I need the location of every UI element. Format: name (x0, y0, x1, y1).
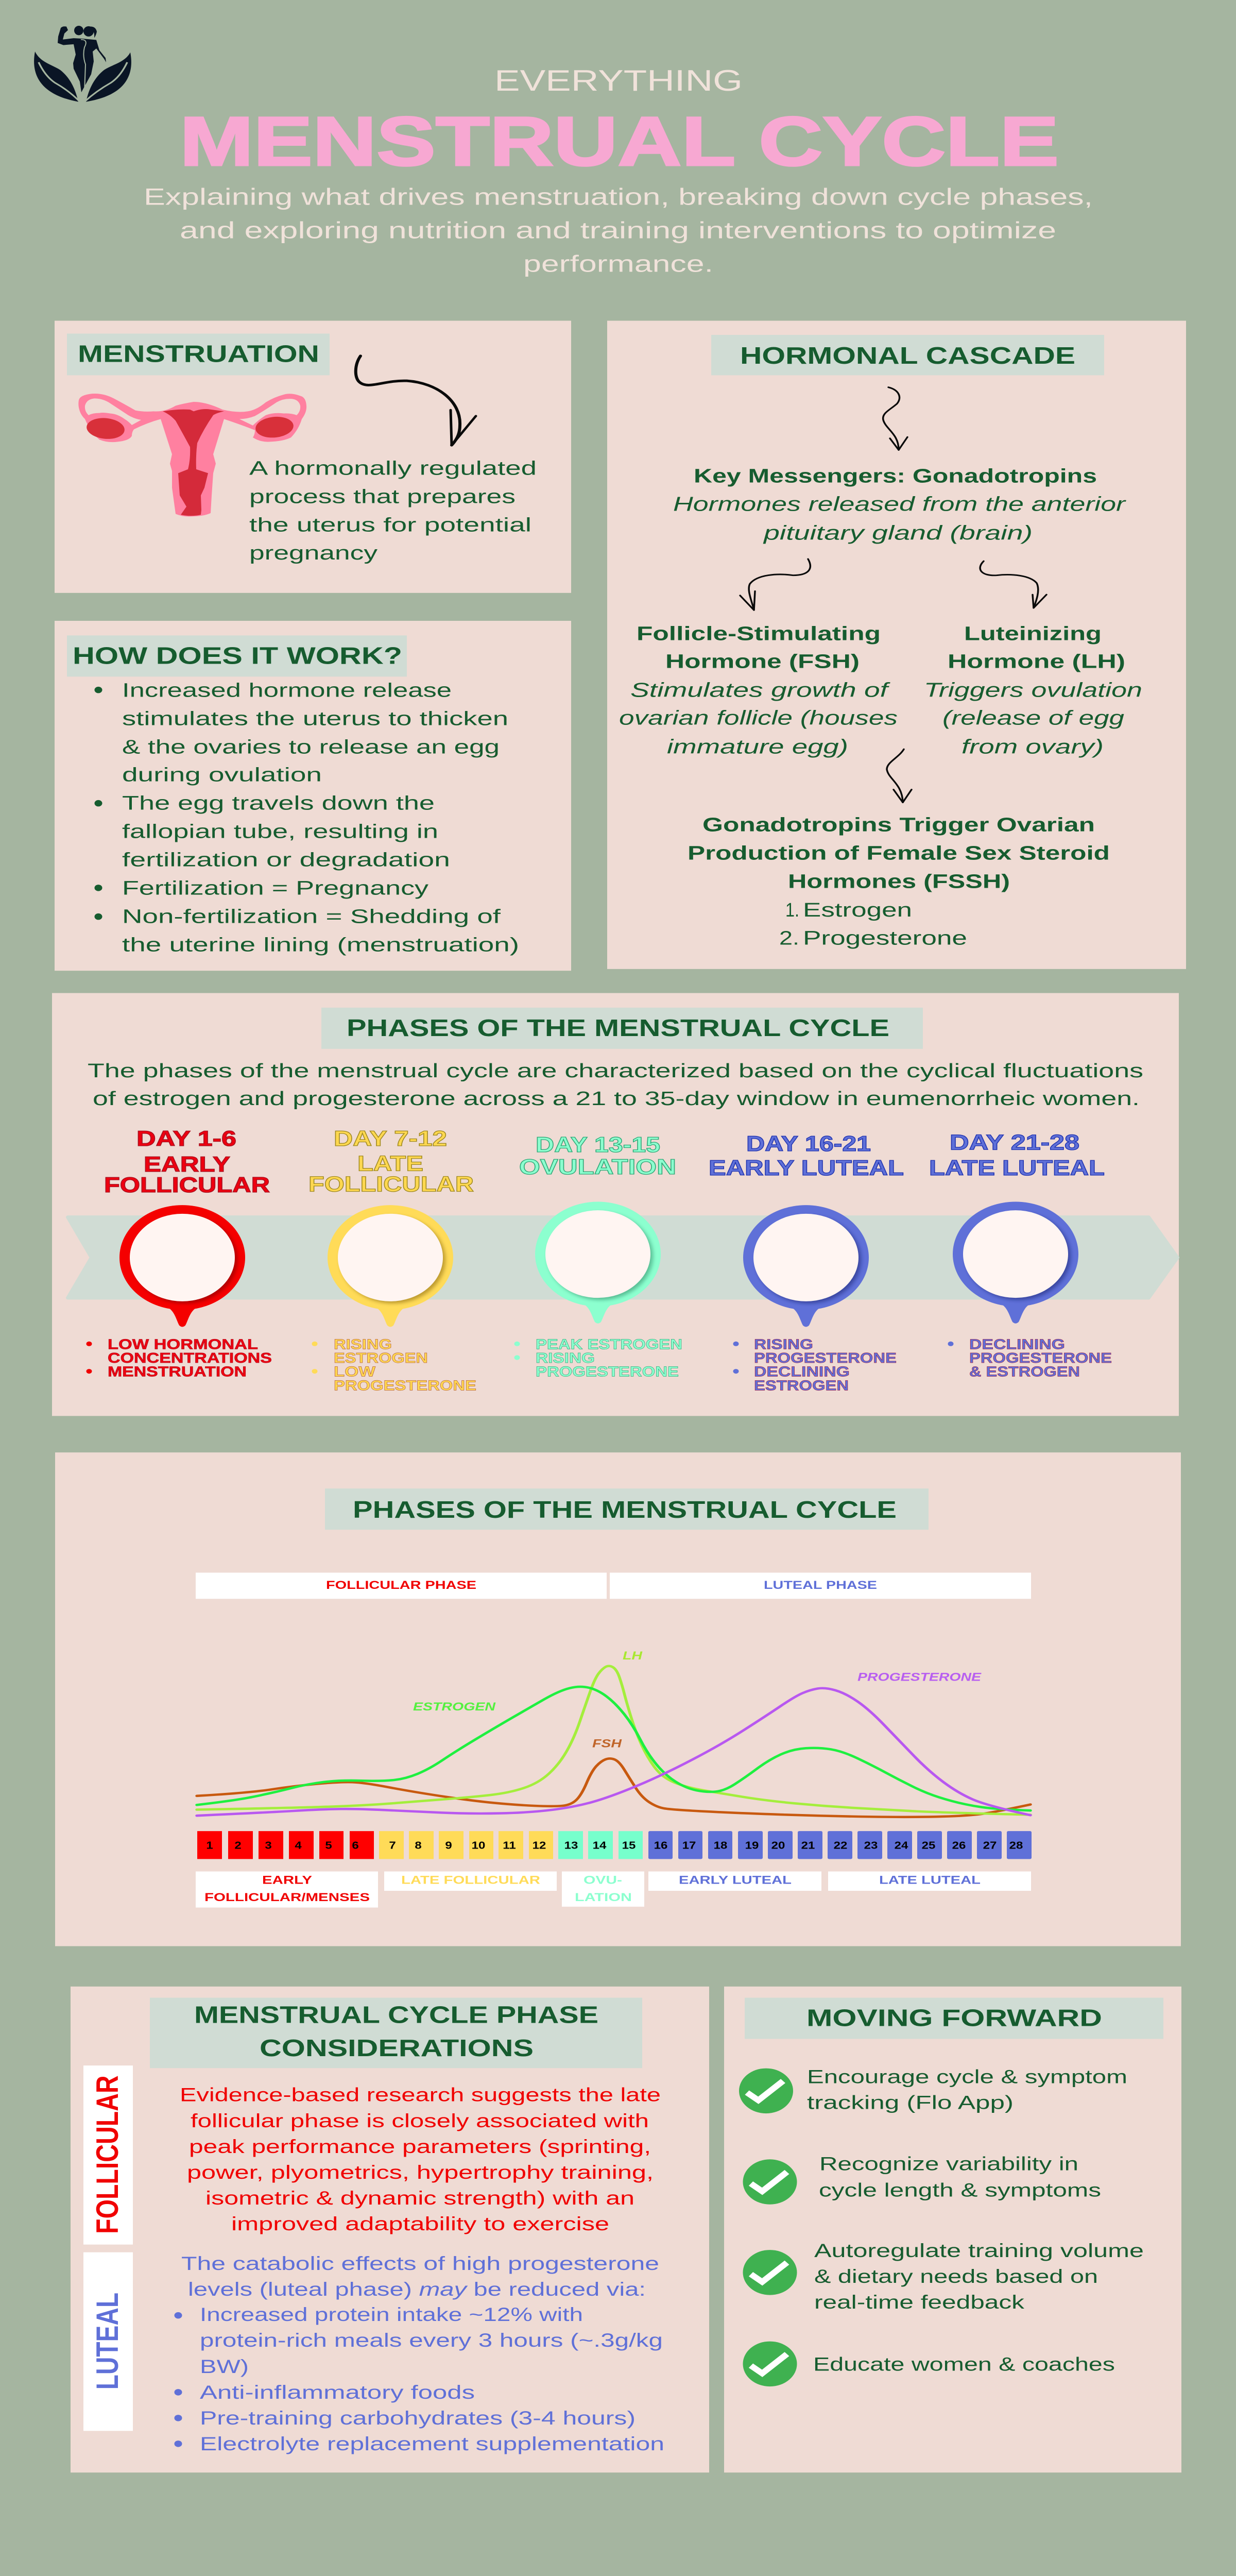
text: ovarian production: Gonadotropins Trigger Ovarian (702, 814, 1095, 835)
notes: late luteal: PROGESTERONE (969, 1350, 1112, 1366)
text: ovarian production: 1. (785, 899, 799, 921)
phase heading: early follicular: EARLY (144, 1152, 230, 1176)
main title: MENSTRUAL CYCLE (180, 103, 1059, 180)
panel: hormonal cascade (607, 320, 1186, 969)
text: intro: of estrogen and progesterone across a 21 to 35-day window in eumenorrheic women. (93, 1088, 1140, 1109)
text: definition: process that prepares (249, 485, 516, 507)
day strip: days 1 to 28: 9 (445, 1839, 452, 1851)
notes: early luteal: RISING (754, 1337, 813, 1352)
notes: early follicular: LOW HORMONAL (108, 1337, 258, 1352)
side label: follicular: FOLLICULAR (90, 2075, 125, 2234)
icon: logo, flexing woman with leaves (34, 26, 131, 102)
bullet list: stimulates the uterus to thicken (122, 707, 508, 730)
pin: early luteal (743, 1205, 869, 1327)
bullet list: fallopian tube, resulting in (122, 820, 438, 842)
text: key messengers: Hormones released from the anterior (673, 493, 1126, 516)
label: early luteal (648, 1871, 821, 1891)
curve label: LH: LH (623, 1650, 643, 1662)
text: follicular evidence: Evidence-based research suggests the late (180, 2084, 661, 2105)
item: variability: Recognize variability in (819, 2153, 1078, 2175)
icon: uterus illustration (78, 394, 306, 517)
notes: early follicular: CONCENTRATIONS (108, 1350, 272, 1366)
notes: ovulation: PEAK ESTROGEN (536, 1337, 682, 1352)
phase heading: late follicular: FOLLICULAR (308, 1172, 474, 1196)
day strip: days 1 to 28: 14 (593, 1839, 607, 1851)
phase heading: late luteal: LATE LUTEAL (929, 1156, 1105, 1180)
item: cycle tracking (739, 2066, 1127, 2113)
notes: ovulation (514, 1337, 682, 1380)
text: follicular evidence: isometric & dynamic strength) with an (205, 2188, 634, 2209)
curve: progesterone (197, 1688, 1031, 1816)
phase heading: early follicular (104, 1126, 270, 1197)
text: ovarian production: Progesterone (803, 927, 967, 948)
day strip: days 1 to 28: 26 (952, 1839, 966, 1851)
label: early follicular/menses: FOLLICULAR/MENSES (204, 1891, 370, 1904)
bullet list (95, 679, 519, 956)
bullet list: The egg travels down the (122, 792, 435, 814)
text: luteinizing hormone: Triggers ovulation (924, 679, 1142, 702)
text: definition: the uterus for potential (249, 514, 531, 536)
heading: menstruation (67, 334, 330, 375)
ribbon arrow (68, 1217, 1177, 1298)
heading: phases of the menstrual cycle (325, 1488, 929, 1530)
heading: menstrual cycle phase considerations: CONSIDERATIONS (260, 2034, 534, 2061)
pin: late luteal (953, 1201, 1078, 1324)
panel: phase considerations (71, 1987, 709, 2472)
text: follicle-stimulating hormone: Hormone (FSH) (665, 650, 860, 672)
text: luteal interventions: BW) (200, 2355, 249, 2377)
text: definition (249, 457, 537, 564)
day strip: days 1 to 28: 17 (682, 1839, 696, 1851)
panel: moving forward (724, 1987, 1181, 2472)
pin: ovulation (535, 1201, 661, 1324)
text: ovarian production (688, 814, 1110, 948)
day strip: days 1 to 28: 16 (654, 1839, 667, 1851)
day strip: days 1 to 28: 25 (922, 1839, 935, 1851)
text: luteal interventions: Electrolyte replacement supplementation (200, 2433, 664, 2454)
item: variability (743, 2153, 1101, 2205)
heading: moving forward (745, 1998, 1163, 2039)
arrow: wavy down to sex steroids (887, 749, 912, 803)
text: definition: A hormonally regulated (249, 457, 537, 479)
phase heading: early luteal (709, 1131, 904, 1180)
label: late luteal (828, 1871, 1031, 1891)
heading: how does it work (67, 635, 407, 676)
side label: luteal: LUTEAL (90, 2293, 125, 2389)
day strip: days 1 to 28: 7 (389, 1839, 396, 1851)
subtitle: and exploring nutrition and training interventions to optimize (180, 217, 1056, 243)
bullet list: Fertilization = Pregnancy (122, 877, 429, 899)
label: late follicular (384, 1871, 557, 1891)
curve: LH (197, 1666, 1031, 1815)
notes: early luteal: PROGESTERONE (754, 1350, 897, 1366)
banner: luteal phase: LUTEAL PHASE (764, 1579, 877, 1592)
phase heading: early follicular: FOLLICULAR (104, 1173, 270, 1197)
text: follicle-stimulating hormone: ovarian follicle (houses (619, 707, 898, 730)
day strip: days 1 to 28: 22 (834, 1839, 847, 1851)
bullet list: fertilization or degradation (122, 849, 450, 871)
curve: estrogen (197, 1687, 1031, 1810)
text: ovarian production: Estrogen (803, 899, 912, 921)
heading: phases of the menstrual cycle (321, 1008, 923, 1049)
day strip: days 1 to 28: 11 (503, 1839, 516, 1851)
side label: follicular (83, 2065, 133, 2245)
text: follicle-stimulating hormone: Stimulates growth of (630, 679, 890, 702)
text: follicular evidence: improved adaptability to exercise (231, 2213, 609, 2234)
text: luteinizing hormone (924, 622, 1142, 758)
text: follicle-stimulating hormone: Follicle-Stimulating (637, 622, 881, 645)
item: autoregulate (743, 2240, 1144, 2313)
subtitle (144, 184, 1093, 277)
text: luteal interventions: Pre-training carbohydrates (3-4 hours) (200, 2407, 636, 2429)
heading: hormonal cascade: HORMONAL CASCADE (740, 342, 1075, 369)
text: luteinizing hormone: (release of egg (942, 707, 1124, 730)
banner: follicular phase: FOLLICULAR PHASE (326, 1579, 476, 1592)
subtitle: performance. (523, 251, 713, 277)
side label: luteal (83, 2252, 133, 2431)
day strip: days 1 to 28: 23 (864, 1839, 878, 1851)
text: luteinizing hormone: Luteinizing (964, 622, 1102, 645)
label: early follicular/menses: EARLY (262, 1874, 313, 1887)
banner: follicular phase (196, 1572, 607, 1599)
text: definition: pregnancy (249, 541, 378, 564)
label: late luteal: LATE LUTEAL (879, 1874, 981, 1887)
day strip: days 1 to 28: 3 (265, 1839, 272, 1851)
label: early follicular/menses (196, 1871, 378, 1907)
pin: late follicular (328, 1205, 453, 1327)
heading: hormonal cascade (711, 335, 1104, 375)
phase heading: early follicular: DAY 1-6 (136, 1126, 236, 1150)
label: ovulation: LATION (575, 1891, 632, 1904)
label: ovulation: OVU- (583, 1874, 622, 1887)
phase heading: ovulation: DAY 13-15 (536, 1132, 660, 1157)
phase heading: early luteal: EARLY LUTEAL (709, 1156, 904, 1180)
notes: late follicular: LOW (334, 1364, 375, 1380)
bullet list: Increased hormone release (122, 679, 452, 701)
day strip: days 1 to 28: 2 (234, 1839, 242, 1851)
item: cycle tracking: Encourage cycle & symptom (807, 2066, 1127, 2087)
heading: menstrual cycle phase considerations (150, 1998, 642, 2068)
notes: early follicular (87, 1337, 272, 1380)
label: early luteal: EARLY LUTEAL (679, 1874, 792, 1887)
heading: phases of the menstrual cycle: PHASES OF THE MENSTRUAL CYCLE (347, 1014, 889, 1041)
bullet list: & the ovaries to release an egg (122, 736, 500, 758)
phase heading: early luteal: DAY 16-21 (746, 1131, 871, 1156)
phase heading: late luteal: DAY 21-28 (950, 1130, 1079, 1155)
day strip: days 1 to 28: 13 (564, 1839, 578, 1851)
curve label: progesterone: PROGESTERONE (857, 1671, 982, 1684)
phase heading: late follicular: LATE (357, 1151, 423, 1176)
subtitle: Explaining what drives menstruation, breaking down cycle phases, (144, 184, 1093, 210)
item: autoregulate: Autoregulate training volume (814, 2240, 1144, 2261)
text: follicular evidence: power, plyometrics, hypertrophy training, (187, 2162, 654, 2183)
label: late follicular: LATE FOLLICULAR (401, 1874, 540, 1887)
panel: hormone chart (55, 1452, 1181, 1946)
panel: menstruation (55, 320, 571, 593)
notes: late follicular: RISING (334, 1337, 392, 1352)
item: autoregulate: real-time feedback (814, 2291, 1025, 2313)
arrow: wavy down to key messengers (883, 387, 907, 450)
text: luteinizing hormone: from ovary) (962, 736, 1104, 758)
day strip: days 1 to 28: 18 (714, 1839, 727, 1851)
text: luteal interventions: levels (luteal phase) may be reduced via: (188, 2278, 646, 2300)
text: luteal interventions: protein-rich meals every 3 hours (~.3g/kg (200, 2330, 663, 2351)
text: ovarian production: 2. (779, 927, 799, 948)
text: key messengers (673, 465, 1126, 545)
text: luteal interventions: The catabolic effects of high progesterone (181, 2252, 659, 2274)
panel: how does it work (55, 621, 571, 971)
arrow: to FSH (740, 559, 810, 610)
line chart: hormone curves (197, 1650, 1031, 1817)
text: key messengers: pituitary gland (brain) (762, 522, 1033, 545)
day strip: days 1 to 28: 4 (295, 1839, 302, 1851)
text: luteal interventions: Increased protein intake ~12% with (200, 2304, 583, 2325)
day strip: days 1 to 28: 28 (1009, 1839, 1023, 1851)
day strip: days 1 to 28: 21 (801, 1839, 815, 1851)
heading: moving forward: MOVING FORWARD (806, 2004, 1102, 2031)
curve: FSH (197, 1758, 1031, 1817)
bullet list: during ovulation (122, 764, 322, 786)
phase heading: late follicular (308, 1126, 474, 1196)
curve label: estrogen: ESTROGEN (413, 1701, 496, 1713)
text: luteal interventions (174, 2252, 664, 2454)
notes: late luteal (948, 1337, 1112, 1380)
item: educate: Educate women & coaches (813, 2353, 1115, 2375)
phase heading: ovulation (519, 1132, 676, 1179)
phase heading: late follicular: DAY 7-12 (334, 1126, 447, 1150)
pin: early follicular (119, 1205, 245, 1327)
arrow: hand-drawn curve (356, 356, 476, 445)
item: autoregulate: & dietary needs based on (814, 2265, 1098, 2287)
text: follicular evidence: peak performance parameters (sprinting, (189, 2136, 651, 2157)
day strip: days 1 to 28 (197, 1831, 1032, 1859)
text: follicle-stimulating hormone (619, 622, 898, 758)
notes: late follicular (312, 1337, 476, 1394)
notes: late luteal: DECLINING (969, 1337, 1065, 1352)
bullet list: the uterine lining (menstruation) (122, 934, 519, 956)
day strip: days 1 to 28: 15 (622, 1839, 636, 1851)
text: follicle-stimulating hormone: immature egg) (667, 736, 848, 758)
text: follicular evidence (180, 2084, 661, 2234)
item: educate (743, 2342, 1115, 2386)
day strip: days 1 to 28: 24 (895, 1839, 908, 1851)
heading: menstrual cycle phase considerations: MENSTRUAL CYCLE PHASE (194, 2001, 598, 2028)
item: cycle tracking: tracking (Flo App) (807, 2092, 1014, 2113)
day strip: days 1 to 28: 5 (325, 1839, 332, 1851)
panel: phases timeline (52, 993, 1179, 1416)
title block (144, 64, 1093, 277)
arrow: to LH (980, 561, 1046, 608)
bullet list: Non-fertilization = Shedding of (122, 905, 501, 927)
text: intro: The phases of the menstrual cycle are characterized based on the cyclical fluctuations (88, 1059, 1143, 1081)
text: luteinizing hormone: Hormone (LH) (948, 650, 1125, 672)
notes: ovulation: PROGESTERONE (536, 1364, 679, 1380)
phase heading: late luteal (929, 1130, 1105, 1180)
phase heading: ovulation: OVULATION (519, 1155, 676, 1179)
notes: early luteal: ESTROGEN (754, 1378, 849, 1394)
notes: late follicular: PROGESTERONE (334, 1378, 476, 1394)
day strip: days 1 to 28: 1 (206, 1839, 213, 1851)
day strip: days 1 to 28: 10 (472, 1839, 485, 1851)
heading: menstruation: MENSTRUATION (78, 340, 319, 367)
heading: phases of the menstrual cycle: PHASES OF THE MENSTRUAL CYCLE (353, 1496, 897, 1523)
day strip: days 1 to 28: 12 (533, 1839, 546, 1851)
notes: early follicular: MENSTRUATION (108, 1364, 247, 1380)
curve label: FSH: FSH (592, 1738, 622, 1750)
day strip: days 1 to 28: 27 (983, 1839, 997, 1851)
notes: ovulation: RISING (536, 1350, 595, 1366)
day strip: days 1 to 28: 6 (352, 1839, 359, 1851)
notes: early luteal (733, 1337, 897, 1394)
kicker: everything: EVERYTHING (494, 64, 743, 97)
text: ovarian production: Hormones (FSSH) (788, 870, 1010, 892)
text: luteal interventions: Anti-inflammatory foods (200, 2381, 475, 2403)
heading: how does it work: HOW DOES IT WORK? (73, 642, 402, 669)
day strip: days 1 to 28: 20 (771, 1839, 785, 1851)
label: ovulation (562, 1871, 644, 1907)
text: ovarian production: Production of Female Sex Steroid (688, 842, 1110, 863)
text: follicular evidence: follicular phase is closely associated with (191, 2110, 649, 2131)
item: variability: cycle length & symptoms (819, 2179, 1101, 2200)
notes: late follicular: ESTROGEN (334, 1350, 428, 1366)
notes: early luteal: DECLINING (754, 1364, 850, 1380)
text: intro (88, 1059, 1143, 1109)
banner: luteal phase (610, 1572, 1031, 1599)
text: key messengers: Key Messengers: Gonadotropins (694, 465, 1097, 487)
notes: late luteal: & ESTROGEN (969, 1364, 1080, 1380)
day strip: days 1 to 28: 8 (415, 1839, 422, 1851)
day strip: days 1 to 28: 19 (745, 1839, 759, 1851)
